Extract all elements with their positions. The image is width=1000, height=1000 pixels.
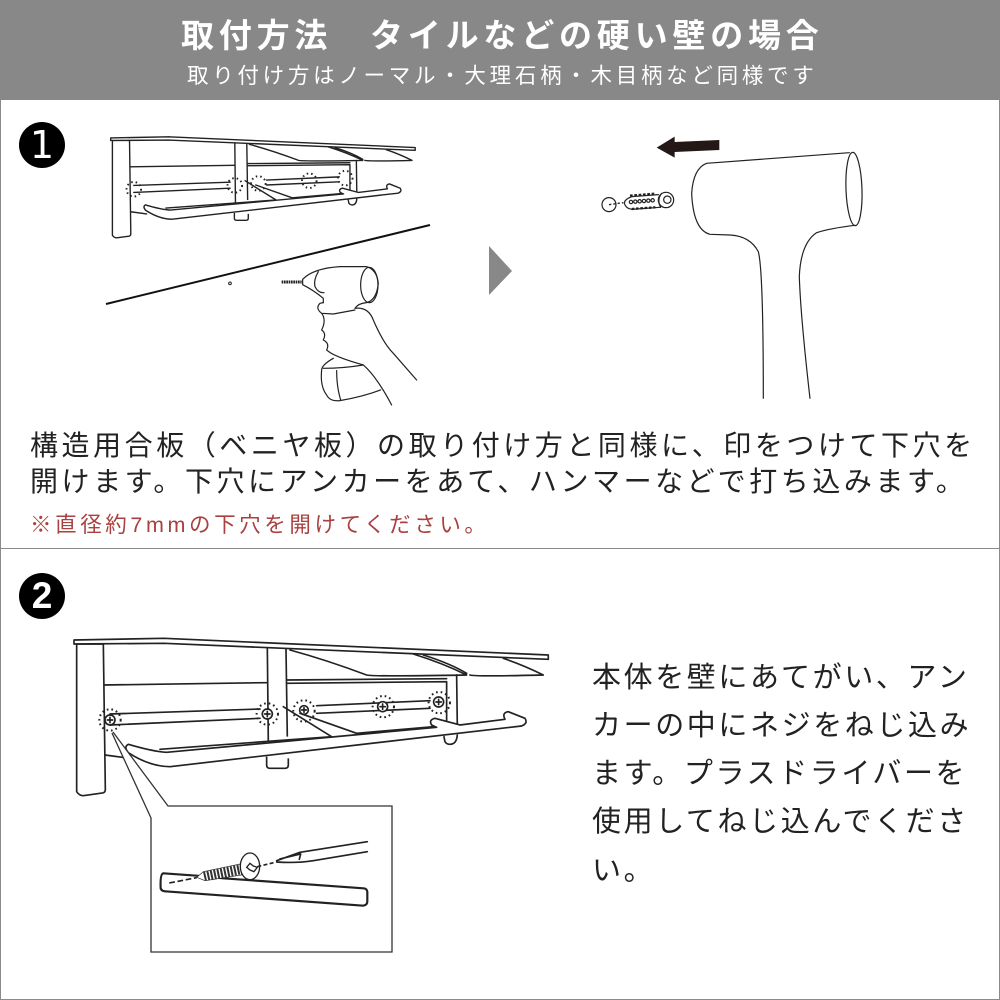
arrow: next step triangle [489, 246, 512, 295]
step 2 body text: カーの中にネジをねじ込み [592, 710, 971, 742]
step number 1 [19, 122, 65, 168]
step 2 body text: ます。プラスドライバーを [592, 758, 967, 790]
step 2 body text [592, 662, 971, 887]
section divider [0, 548, 1000, 549]
hammer face [845, 152, 863, 226]
step 1 note: ※直径約7mmの下穴を開けてください。 [30, 513, 490, 537]
illustration: shelf with marked screw positions [111, 137, 415, 238]
step number 2: 2 [32, 575, 52, 616]
arrow: hammering direction [657, 137, 719, 158]
hammer [692, 153, 855, 398]
step 2 body text: 本体を壁にあてがい、アン [592, 662, 969, 694]
drilled hole [229, 282, 231, 285]
step 2 body text: 使用してねじ込んでくださ [592, 806, 969, 838]
illustration: wall and drill [106, 225, 430, 405]
drill [282, 267, 417, 405]
detail callout box [112, 732, 392, 952]
header band [0, 0, 1000, 100]
step number 1: 1 [30, 123, 54, 167]
wall line [106, 225, 430, 304]
step 1 body text: 構造用合板（ベニヤ板）の取り付け方と同様に、印をつけて下穴を [30, 430, 976, 461]
illustration: anchor and hammer [602, 137, 863, 398]
illustration: shelf with screws [74, 638, 548, 796]
title: 取付方法 タイルなどの硬い壁の場合 [181, 17, 824, 54]
subtitle: 取り付け方はノーマル・大理石柄・木目柄など同様です [187, 64, 818, 88]
wall anchor [602, 192, 674, 212]
step number 2 [19, 573, 65, 619]
step 1 body text [30, 430, 976, 497]
step 2 body text: い。 [592, 855, 655, 887]
step 1 body text: 開けます。下穴にアンカーをあて、ハンマーなどで打ち込みます。 [30, 466, 967, 497]
detail: screw and screwdriver [161, 842, 367, 906]
